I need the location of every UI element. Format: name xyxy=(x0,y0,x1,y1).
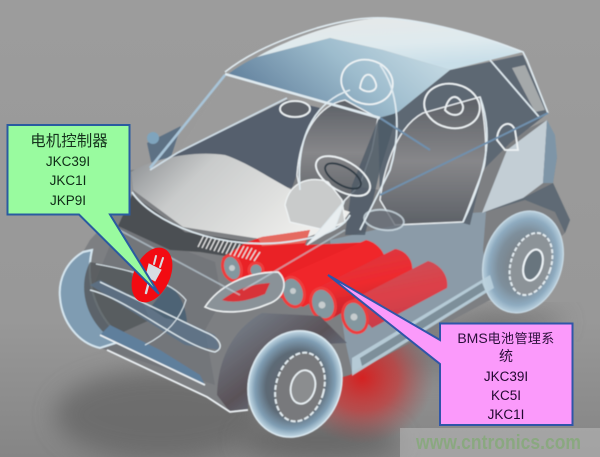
roof white top xyxy=(257,18,523,70)
callout model list: JKC1I xyxy=(50,173,86,188)
front-right wheel xyxy=(233,318,357,450)
headrests and wheel outlines xyxy=(280,54,518,233)
rear dark cabin xyxy=(378,55,548,225)
motor controller marker: red plug xyxy=(123,241,181,309)
headlight-shaped reflector xyxy=(205,272,284,312)
glass frame lines xyxy=(90,18,548,412)
rear wheel xyxy=(470,200,576,324)
roof blue glass xyxy=(227,38,450,118)
controller housing xyxy=(150,285,187,323)
callout model list: JKP9I xyxy=(50,193,86,208)
mirror knob xyxy=(147,132,159,144)
bumper lower strip xyxy=(100,325,205,385)
BMS model list xyxy=(484,369,528,422)
car lower body base xyxy=(60,120,570,412)
front seat xyxy=(297,100,378,205)
BMS model list: KC5I xyxy=(491,388,521,403)
windshield open xyxy=(177,78,287,153)
central dark column xyxy=(345,112,398,235)
floor shadow and red glow xyxy=(55,312,565,457)
side sill xyxy=(352,275,494,376)
battery cylinder 3 xyxy=(287,240,385,307)
rear pillar bumps xyxy=(543,120,557,183)
front fascia dark zone xyxy=(88,225,222,385)
battery red block xyxy=(222,230,385,307)
icon: plug xyxy=(146,256,163,293)
pale red panel xyxy=(258,230,310,246)
rear glass xyxy=(512,65,545,112)
white steering shard xyxy=(307,200,345,245)
rear haunch dark xyxy=(482,183,570,233)
rear side light panel xyxy=(482,120,547,213)
rear seat xyxy=(380,97,486,225)
front grille dark band xyxy=(118,195,270,262)
battery cylinder 5 xyxy=(348,261,447,328)
A pillar triangle xyxy=(147,126,181,166)
watermark: www.cntronics.com xyxy=(415,432,581,454)
BMS heading wrap: 统 xyxy=(499,348,513,364)
front-left wheel arch xyxy=(60,250,150,348)
callout heading: 电机控制器 xyxy=(30,132,108,150)
battery pack xyxy=(219,230,447,336)
battery cylinder 4 xyxy=(317,249,412,318)
BMS model list: JKC39I xyxy=(484,369,528,384)
callout model list: JKC39I xyxy=(46,154,90,169)
vent grille xyxy=(198,235,260,261)
underbody side panel xyxy=(330,212,490,372)
callout: motor controller xyxy=(8,125,159,294)
battery cell ends xyxy=(219,253,371,336)
blue diagonal seat lines xyxy=(380,113,548,195)
callout model list xyxy=(46,154,90,208)
tire side of front-right wheel xyxy=(217,313,347,412)
watermark xyxy=(400,428,600,457)
hood and dashboard top xyxy=(131,154,350,240)
steering column white shape xyxy=(285,180,345,230)
BMS model list: JKC1I xyxy=(488,407,524,422)
mid front fog-light band xyxy=(90,280,220,350)
callout: BMS battery management system xyxy=(328,275,572,425)
BMS heading: BMS电池管理系 xyxy=(457,330,555,346)
dashboard dark panel xyxy=(153,100,320,188)
